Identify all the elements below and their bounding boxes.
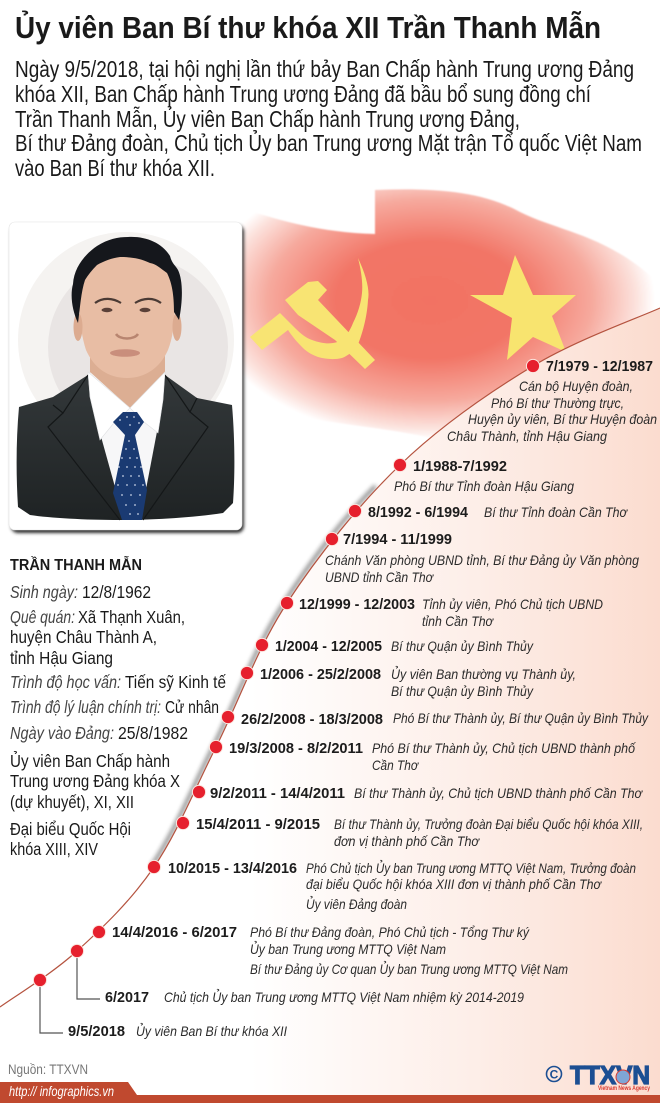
intro text: vào Ban Bí thư khóa XII. xyxy=(15,155,215,181)
intro text xyxy=(15,56,642,181)
timeline entry: 7/1994 - 11/1999: 7/1994 - 11/1999 xyxy=(343,531,452,548)
timeline entry: 14/4/2016 - 6/2017: 14/4/2016 - 6/2017 xyxy=(112,924,237,941)
icon: star xyxy=(470,255,576,360)
timeline entry: 7/1979 - 12/1987: Phó Bí thư Thường trực, xyxy=(491,395,624,411)
political theory: Cử nhân xyxy=(165,697,219,717)
timeline entry: 9/5/2018: 9/5/2018 xyxy=(68,1023,125,1040)
timeline entry: 6/2017: 6/2017 xyxy=(105,989,149,1006)
title: Ủy viên Ban Bí thư khóa XII Trần Thanh Mẫn xyxy=(15,9,601,45)
timeline entry: 6/2017: Chủ tịch Ủy ban Trung ương MTTQ Việt Nam nhiệm kỳ 2014-2019 xyxy=(164,988,524,1005)
logo: TTXVN: C xyxy=(550,1068,559,1082)
collar xyxy=(88,372,165,440)
timeline entry: 10/2015 - 13/4/2016: Ủy viên Đảng đoàn xyxy=(306,895,407,912)
timeline entry: 8/1992 - 6/1994: Bí thư Tỉnh đoàn Cần Thơ xyxy=(484,504,628,520)
website url: http:// infographics.vn xyxy=(9,1084,114,1099)
political theory: Trình độ lý luận chính trị: xyxy=(10,697,161,717)
lapels xyxy=(48,375,208,520)
logo: TTXVN: Vietnam News Agency xyxy=(598,1086,651,1092)
intro text: Trần Thanh Mẫn, Ủy viên Ban Chấp hành Trung ương Đảng, xyxy=(15,104,520,132)
timeline entry: 12/1999 - 12/2003: 12/1999 - 12/2003 xyxy=(299,596,415,613)
central committee: Ủy viên Ban Chấp hành xyxy=(10,750,170,771)
hometown: Xã Thạnh Xuân, xyxy=(78,607,185,627)
footer bar xyxy=(0,1082,660,1103)
national assembly xyxy=(10,819,131,859)
icon: hammer and sickle xyxy=(250,258,375,369)
face xyxy=(79,256,175,378)
timeline entry: 12/1999 - 12/2003: Tỉnh ủy viên, Phó Chủ tịch UBND xyxy=(422,596,603,612)
timeline entry: 19/3/2008 - 8/2/2011: Cần Thơ xyxy=(372,757,419,773)
timeline entry: 1/1988-7/1992 xyxy=(394,458,574,494)
portrait card xyxy=(9,222,244,533)
timeline entry: 12/1999 - 12/2003: tỉnh Cần Thơ xyxy=(422,613,494,629)
timeline entry: 1/2006 - 25/2/2008 xyxy=(260,665,576,699)
timeline entry: 26/2/2008 - 18/3/2008 xyxy=(241,710,649,728)
logo: TTXVN xyxy=(546,1060,651,1092)
timeline entry: 7/1979 - 12/1987: 7/1979 - 12/1987 xyxy=(546,358,653,375)
tie xyxy=(113,412,147,520)
party join date: 25/8/1982 xyxy=(118,723,188,743)
timeline entry: 1/1988-7/1992: 1/1988-7/1992 xyxy=(413,458,507,475)
timeline entry: 7/1994 - 11/1999: UBND tỉnh Cần Thơ xyxy=(325,569,434,585)
timeline entry: 9/5/2018 xyxy=(68,1022,287,1040)
timeline entry: 19/3/2008 - 8/2/2011: Phó Bí thư Thành ủy, Chủ tịch UBND thành phố xyxy=(372,740,636,756)
timeline entry: 1/2006 - 25/2/2008: Bí thư Quận ủy Bình Thủy xyxy=(391,683,534,699)
timeline entry: 9/5/2018: Ủy viên Ban Bí thư khóa XII xyxy=(136,1022,287,1039)
ears xyxy=(74,313,182,341)
central committee: Trung ương Đảng khóa X xyxy=(10,771,180,791)
profile xyxy=(10,555,226,859)
hometown: tỉnh Hậu Giang xyxy=(10,648,113,668)
timeline entry: 26/2/2008 - 18/3/2008: 26/2/2008 - 18/3/2008 xyxy=(241,711,383,728)
flag background xyxy=(225,189,660,470)
timeline curve xyxy=(0,308,660,1103)
timeline entry: 12/1999 - 12/2003 xyxy=(299,596,603,629)
timeline entry: 15/4/2011 - 9/2015: đơn vị thành phố Cần Thơ xyxy=(334,833,480,849)
timeline entry: 10/2015 - 13/4/2016: 10/2015 - 13/4/2016 xyxy=(168,860,297,877)
timeline entry: 1/1988-7/1992: Phó Bí thư Tỉnh đoàn Hậu Giang xyxy=(394,478,574,494)
hair xyxy=(72,237,182,323)
birth date: 12/8/1962 xyxy=(82,582,151,602)
logo: TTXVN: TTXVN xyxy=(570,1060,650,1090)
education xyxy=(10,672,226,692)
birth date: Sinh ngày: xyxy=(10,582,78,602)
central committee: (dự khuyết), XI, XII xyxy=(10,792,134,812)
hometown: huyện Châu Thành A, xyxy=(10,627,157,647)
name: TRẦN THANH MẪN xyxy=(10,555,142,574)
timeline entry: 8/1992 - 6/1994 xyxy=(368,504,628,521)
timeline entry: 1/2006 - 25/2/2008: 1/2006 - 25/2/2008 xyxy=(260,666,381,683)
timeline entry: 14/4/2016 - 6/2017: Ủy ban Trung ương MTTQ Việt Nam xyxy=(250,940,446,957)
national assembly: khóa XIII, XIV xyxy=(10,839,98,859)
facial features xyxy=(95,299,161,357)
timeline connectors xyxy=(40,951,100,1033)
timeline entry: 10/2015 - 13/4/2016 xyxy=(168,859,636,912)
timeline entry: 7/1994 - 11/1999 xyxy=(325,531,639,585)
national assembly: Đại biểu Quốc Hội xyxy=(10,819,131,839)
timeline entry: 14/4/2016 - 6/2017 xyxy=(112,924,568,977)
party join date: Ngày vào Đảng: xyxy=(10,723,114,743)
central committee xyxy=(10,750,180,812)
timeline entry: 19/3/2008 - 8/2/2011 xyxy=(229,740,636,773)
hometown: Quê quán: xyxy=(10,607,75,627)
timeline entry: 9/2/2011 - 14/4/2011: 9/2/2011 - 14/4/2011 xyxy=(210,785,345,802)
timeline entry: 14/4/2016 - 6/2017: Bí thư Đảng ủy Cơ quan Ủy ban Trung ương MTTQ Việt Nam xyxy=(250,960,568,977)
timeline entry: 1/2006 - 25/2/2008: Ủy viên Ban thường vụ Thành ủy, xyxy=(391,665,576,682)
timeline entry: 8/1992 - 6/1994: 8/1992 - 6/1994 xyxy=(368,504,469,521)
timeline entry: 15/4/2011 - 9/2015 xyxy=(196,816,643,849)
education: Trình độ học vấn: xyxy=(10,672,121,692)
timeline entry: 1/2004 - 12/2005 xyxy=(275,638,534,655)
timeline entry: 1/2004 - 12/2005: 1/2004 - 12/2005 xyxy=(275,638,382,655)
timeline entry: 15/4/2011 - 9/2015: 15/4/2011 - 9/2015 xyxy=(196,816,320,833)
hometown xyxy=(10,607,185,668)
timeline entry: 7/1979 - 12/1987: Cán bộ Huyện đoàn, xyxy=(519,378,633,394)
timeline dots xyxy=(33,359,540,987)
timeline entry: 1/2004 - 12/2005: Bí thư Quận ủy Bình Thủy xyxy=(391,638,534,654)
timeline entry: 10/2015 - 13/4/2016: đại biểu Quốc hội khóa XIII đơn vị thành phố Cần Thơ xyxy=(306,876,602,892)
timeline entry: 6/2017 xyxy=(105,988,524,1006)
source: Nguồn: TTXVN xyxy=(8,1061,88,1077)
neck xyxy=(90,345,165,408)
education: Tiến sỹ Kinh tế xyxy=(125,672,226,692)
birth date xyxy=(10,582,151,602)
timeline entry: 14/4/2016 - 6/2017: Phó Bí thư Đảng đoàn, Phó Chủ tịch - Tổng Thư ký xyxy=(250,924,530,940)
timeline entry: 9/2/2011 - 14/4/2011 xyxy=(210,785,643,802)
timeline entry: 19/3/2008 - 8/2/2011: 19/3/2008 - 8/2/2011 xyxy=(229,740,363,757)
timeline entry: 7/1979 - 12/1987 xyxy=(447,358,657,444)
suit xyxy=(17,375,234,520)
shirt xyxy=(88,372,165,505)
timeline entry: 7/1979 - 12/1987: Châu Thành, tỉnh Hậu Giang xyxy=(447,428,607,444)
